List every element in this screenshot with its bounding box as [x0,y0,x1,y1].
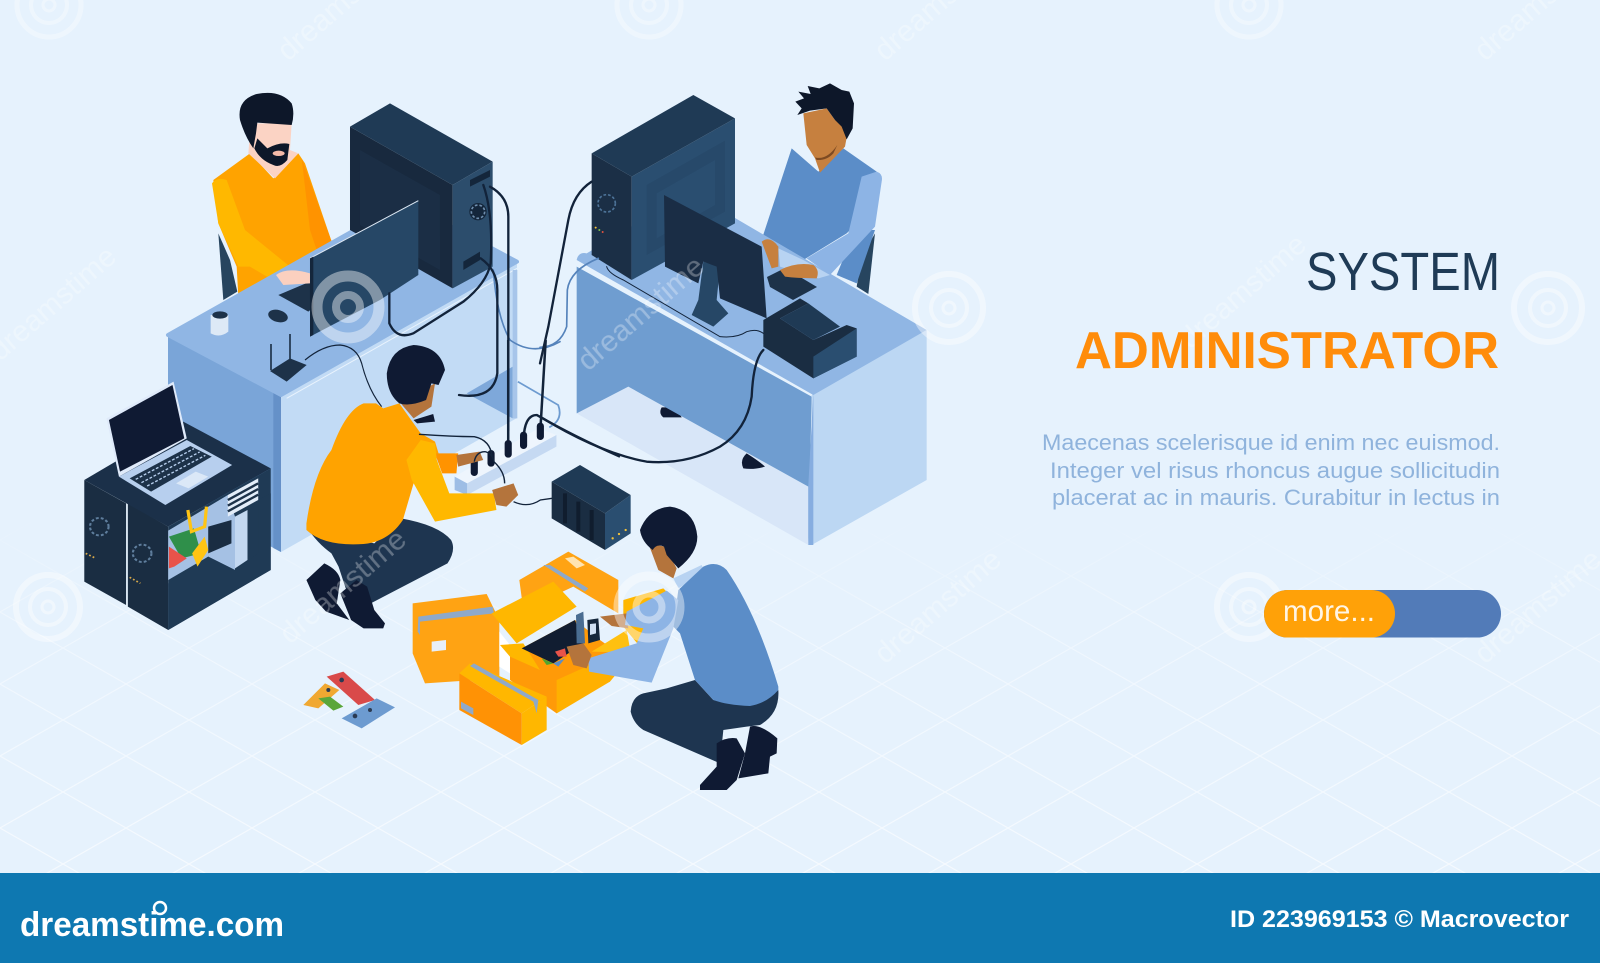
cardboard boxes [413,552,672,745]
title: administrator: ADMINISTRATOR [1075,322,1499,380]
front box [459,663,547,745]
right computer tower [592,95,735,280]
mouse [267,308,289,324]
person 3: man in orange kneeling at power strip [306,345,552,628]
body text: Integer vel risus rhoncus augue sollicitudin [1050,458,1500,483]
watermark wordmarks [0,0,1600,670]
footer logo: dreamstime.com [20,906,284,944]
left monitor [310,200,418,337]
printer [763,298,857,378]
left desk [168,202,517,552]
person 1: bearded man in orange at desk [212,93,332,300]
circuit boards on the floor [303,672,395,728]
power strip [455,340,620,495]
watermark wordmarks: dreamstime [1173,228,1313,355]
right desk cables [540,182,763,462]
hand on keyboard [276,270,310,285]
right keyboard [767,268,817,300]
footer credit: ID 223969153 © Macrovector [1230,906,1569,933]
person 2: man in blue at desk [763,83,877,294]
network storage box [552,465,631,550]
watermark wordmarks: dreamstime [273,523,413,650]
pair of computer towers with open case [84,422,271,630]
footer bar [0,873,1600,963]
left box [413,594,499,683]
back box [519,552,672,647]
body text: placerat ac in mauris. Curabitur in lectus in [1052,485,1500,510]
person 4: man in blue kneeling at boxes [567,507,778,790]
right desk [577,192,927,545]
person 2 arms and hands [762,172,882,278]
more button: more... [1283,595,1375,628]
body text [1042,430,1500,510]
watermark wordmarks: dreamstime [571,250,711,377]
router [270,334,382,407]
body text: Maecenas scelerisque id enim nec euismod. [1042,430,1500,455]
title: system: SYSTEM [1306,242,1500,302]
keyboard [278,282,318,312]
mug [211,311,228,335]
watermark spirals [16,0,1582,639]
left desk cables [389,185,560,430]
open box [492,582,633,713]
left computer tower [350,103,493,288]
right monitor [664,195,767,327]
watermark wordmarks: dreamstime [868,543,1008,670]
more button [1264,590,1501,638]
isometric floor grid [0,618,1600,873]
laptop [106,382,232,505]
